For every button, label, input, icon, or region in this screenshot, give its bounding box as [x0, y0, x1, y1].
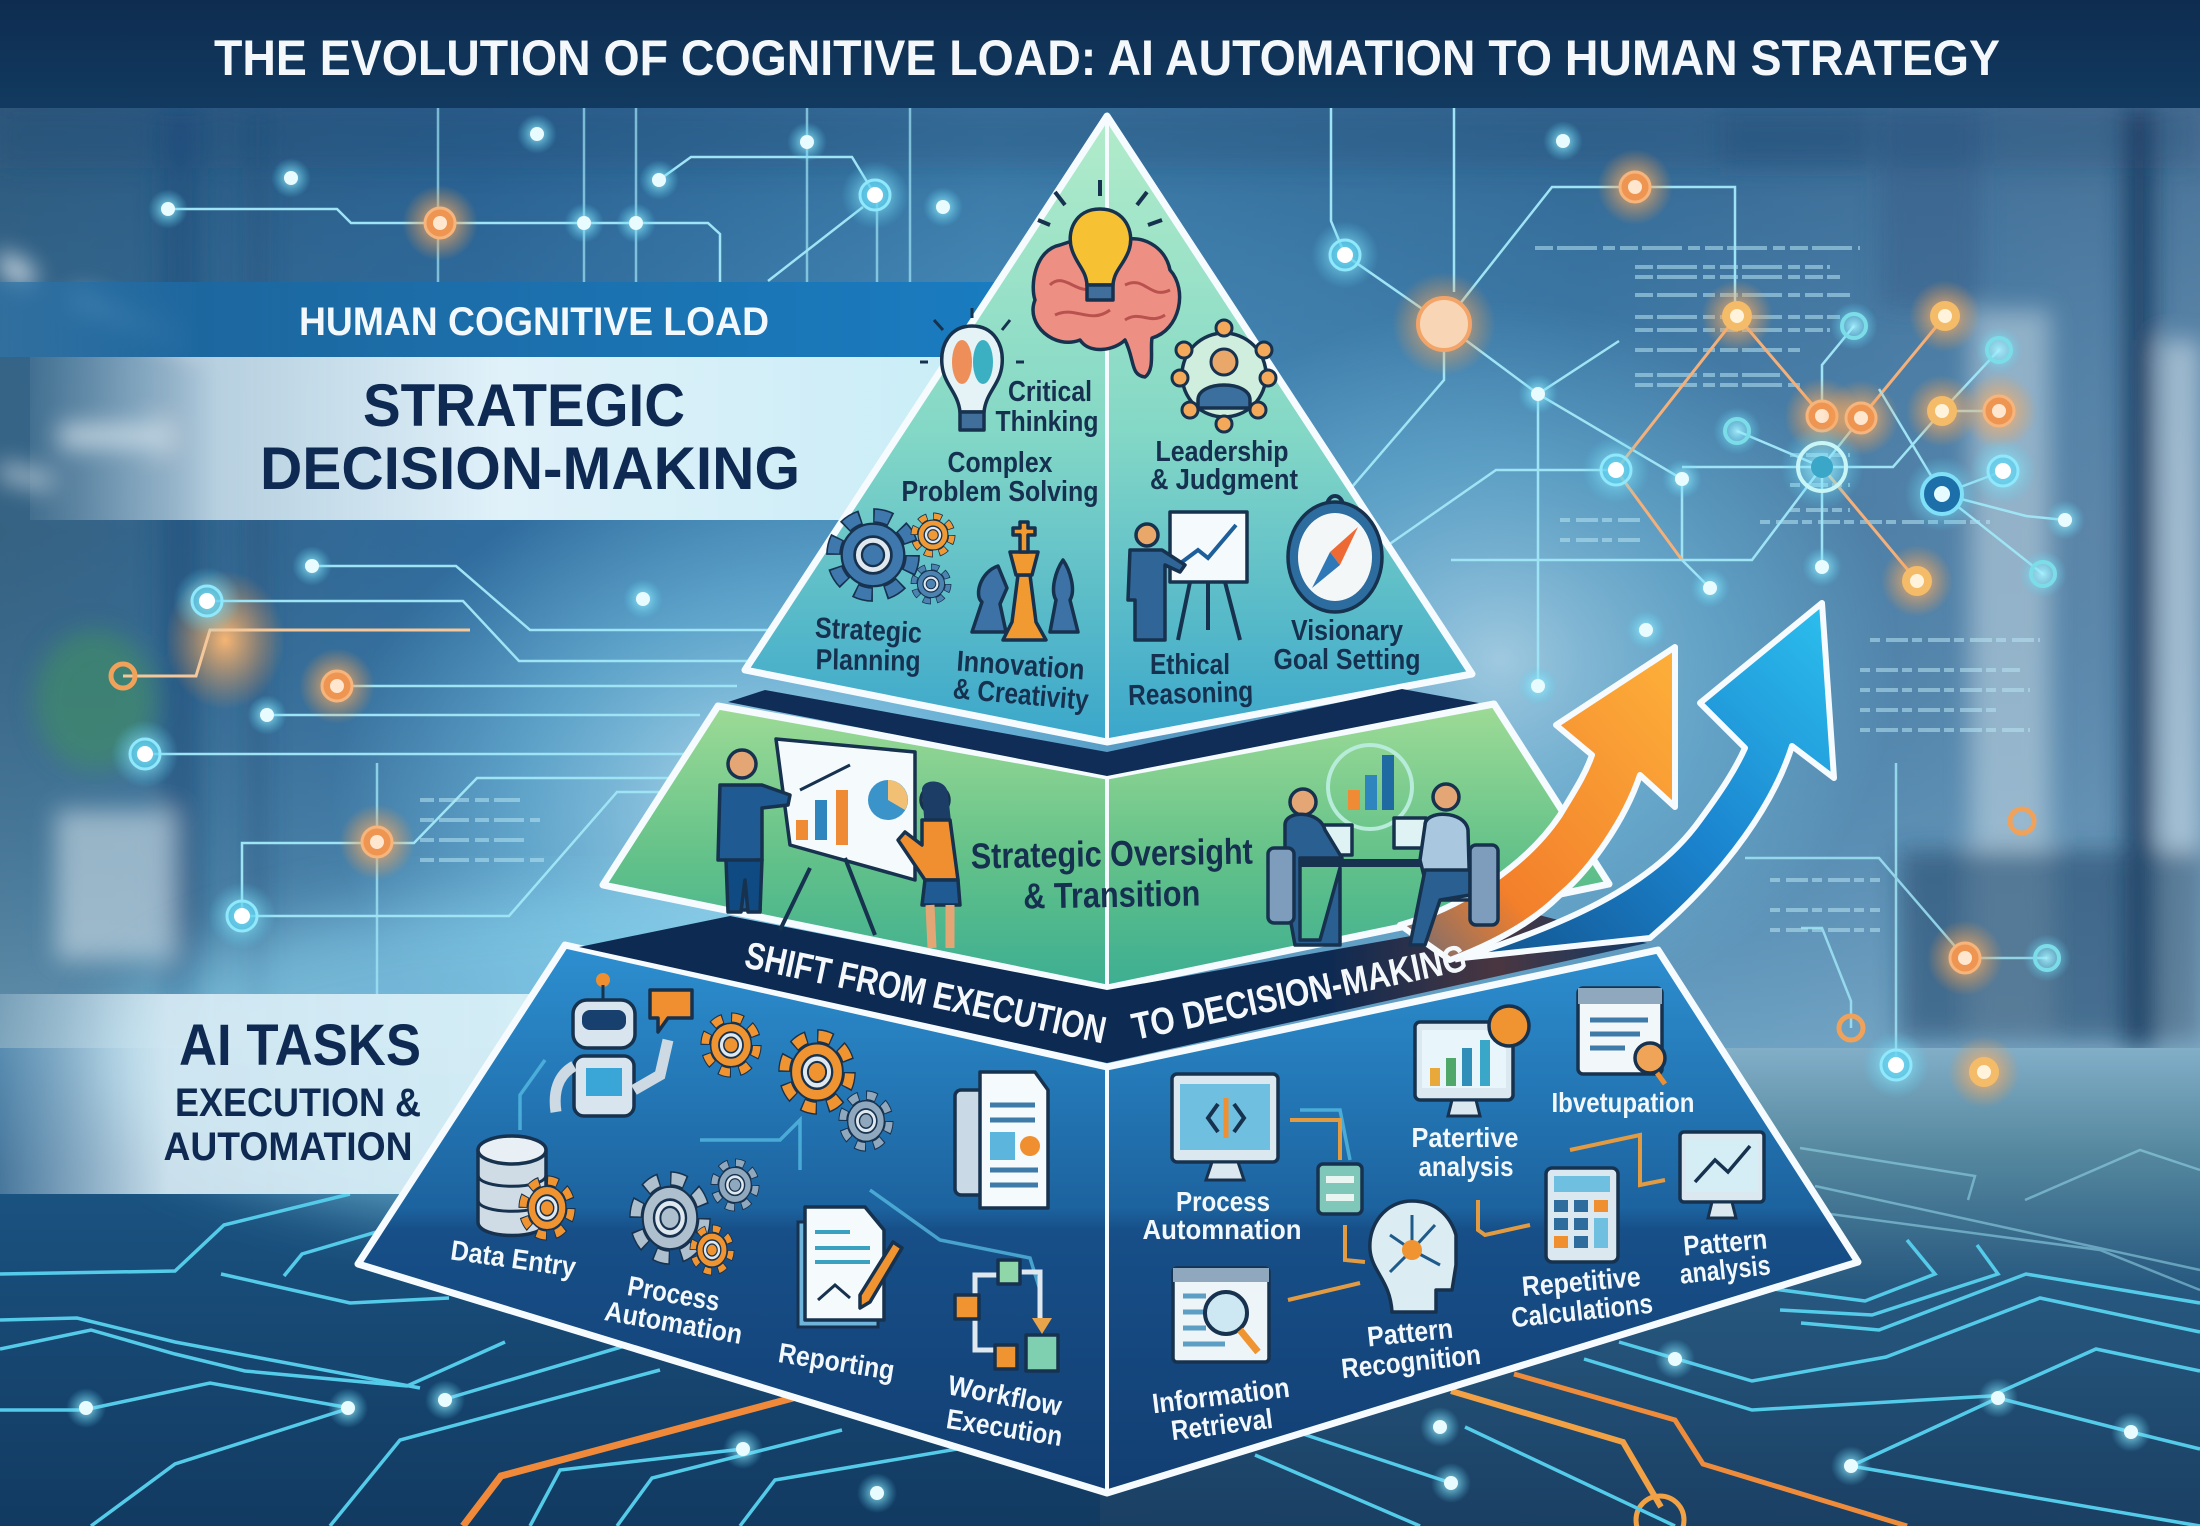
labels: AI tier left face: Data Entry	[449, 1234, 578, 1283]
labels: human tier: Problem Solving	[902, 476, 1098, 508]
icon: meeting at table	[1268, 745, 1498, 945]
tier 3 banner text: TO DECISION-MAKING	[1128, 937, 1471, 1049]
background: blurred office scene	[0, 100, 2200, 1140]
labels: AI tier right face: Pattern	[1366, 1313, 1454, 1352]
labels: human tier: & Creativity	[952, 673, 1090, 717]
labels: human tier: Ethical	[1150, 649, 1230, 681]
pyramid tier 1: teal human tier	[745, 116, 1472, 742]
pyramid tier 2: green transition tier	[603, 704, 1609, 988]
labels: AI tier left face: Workflow	[945, 1369, 1064, 1422]
labels: AI tier right face: Pattern	[1682, 1223, 1768, 1262]
icon: database with gear	[478, 1136, 571, 1236]
icon: robot	[555, 973, 668, 1116]
labels: human tier: Critical	[1008, 376, 1092, 408]
side label: human cognitive load: STRATEGIC	[363, 372, 685, 439]
background: upper left circuit	[111, 108, 963, 994]
icon: workflow diagram	[955, 1260, 1058, 1371]
labels: AI tier left face: Automation	[603, 1295, 745, 1350]
labels: AI tier right face: Patertive	[1412, 1122, 1518, 1153]
labels: AI tier right face: Recognition	[1340, 1339, 1482, 1384]
side label: human cognitive load: HUMAN COGNITIVE LOAD	[299, 300, 769, 344]
navy divider band lower	[579, 914, 1647, 1063]
labels: AI tier right face: Calculations	[1510, 1288, 1654, 1333]
labels: human tier: Goal Setting	[1274, 644, 1420, 676]
icon: browser window with magnifier	[1578, 988, 1665, 1084]
labels: human tier: Strategic	[814, 612, 923, 650]
labels: human tier	[814, 376, 1420, 717]
icon: presentation team	[718, 739, 960, 948]
labels: human tier: Visionary	[1291, 615, 1403, 647]
labels: AI tier right face: Information	[1150, 1372, 1291, 1419]
side label: AI tasks: AI TASKS	[179, 1013, 421, 1078]
icon: small chart monitor	[1680, 1132, 1764, 1218]
labels: AI tier right face: Process	[1176, 1186, 1270, 1217]
side label: AI tasks: EXECUTION &	[175, 1081, 421, 1125]
icon: process gears	[636, 1163, 756, 1272]
navy divider band upper	[728, 689, 1479, 776]
icon: compass	[1288, 496, 1382, 612]
labels: human tier: Thinking	[996, 406, 1098, 438]
labels: human tier: Complex	[948, 447, 1052, 479]
icon: small card	[1318, 1164, 1362, 1214]
labels: human tier: Innovation	[956, 646, 1086, 686]
side label: human cognitive load: DECISION-MAKING	[260, 435, 800, 502]
labels: AI tier left face	[449, 1234, 1065, 1452]
labels: AI tier right face: Retrieval	[1169, 1403, 1274, 1446]
icon: document stack	[955, 1072, 1048, 1208]
labels: AI tier right face: Automnation	[1142, 1214, 1302, 1245]
side label: AI tasks: AUTOMATION	[164, 1125, 412, 1169]
icon: speech bubble	[650, 990, 692, 1032]
icon: chart monitor	[1415, 1006, 1529, 1116]
icon: chess pieces	[972, 522, 1078, 640]
icon: strategic planning gears	[833, 515, 952, 601]
background: circuit floor	[0, 890, 2200, 1526]
labels: AI tier right face: Repetitive	[1521, 1261, 1642, 1302]
labels: AI tier left face: Execution	[944, 1403, 1065, 1452]
labels: transition tier: & Transition	[1023, 872, 1201, 917]
icon: gears group upper	[705, 1017, 889, 1147]
icon: calculator	[1546, 1168, 1618, 1262]
title bar: THE EVOLUTION OF COGNITIVE LOAD: AI AUTOMATION TO HUMAN STRATEGY	[214, 30, 2000, 86]
labels: AI tier right face	[1142, 1087, 1772, 1446]
icon: window with magnifier	[1173, 1268, 1269, 1362]
labels: AI tier right face: analysis	[1678, 1249, 1772, 1290]
arrow: orange growth arrow	[1400, 647, 1675, 960]
background: upper right network	[1311, 108, 2085, 1108]
labels: transition tier	[970, 831, 1253, 917]
icon: code monitor	[1172, 1074, 1278, 1180]
icon: critical thinking bulb	[920, 308, 1024, 430]
title bar	[0, 0, 2200, 108]
labels: AI tier right face: Ibvetupation	[1552, 1087, 1694, 1118]
side label: AI tasks	[0, 994, 560, 1194]
side label: human cognitive load	[0, 282, 1000, 520]
tier 3 banner text	[741, 935, 1471, 1052]
icon: big brain with light bulb	[1033, 180, 1180, 377]
labels: human tier: Reasoning	[1128, 676, 1254, 712]
pyramid tier 3: blue AI tier	[358, 945, 1858, 1493]
labels: transition tier: Strategic Oversight	[970, 831, 1253, 876]
icon: AI head	[1370, 1201, 1456, 1312]
labels: human tier: & Judgment	[1150, 464, 1298, 496]
icon: report with pencil	[798, 1207, 902, 1327]
labels: AI tier left face: Reporting	[776, 1337, 897, 1386]
arrow: blue growth arrow	[1462, 603, 1834, 958]
labels: human tier: Leadership	[1156, 436, 1288, 468]
icon: leadership network	[1172, 320, 1276, 432]
labels: AI tier right face: analysis	[1418, 1151, 1514, 1182]
tier 3 banner text: SHIFT FROM EXECUTION	[741, 935, 1110, 1052]
labels: human tier: Planning	[815, 644, 921, 678]
icon: presenter with chart	[1128, 512, 1247, 640]
labels: AI tier left face: Process	[625, 1270, 722, 1317]
